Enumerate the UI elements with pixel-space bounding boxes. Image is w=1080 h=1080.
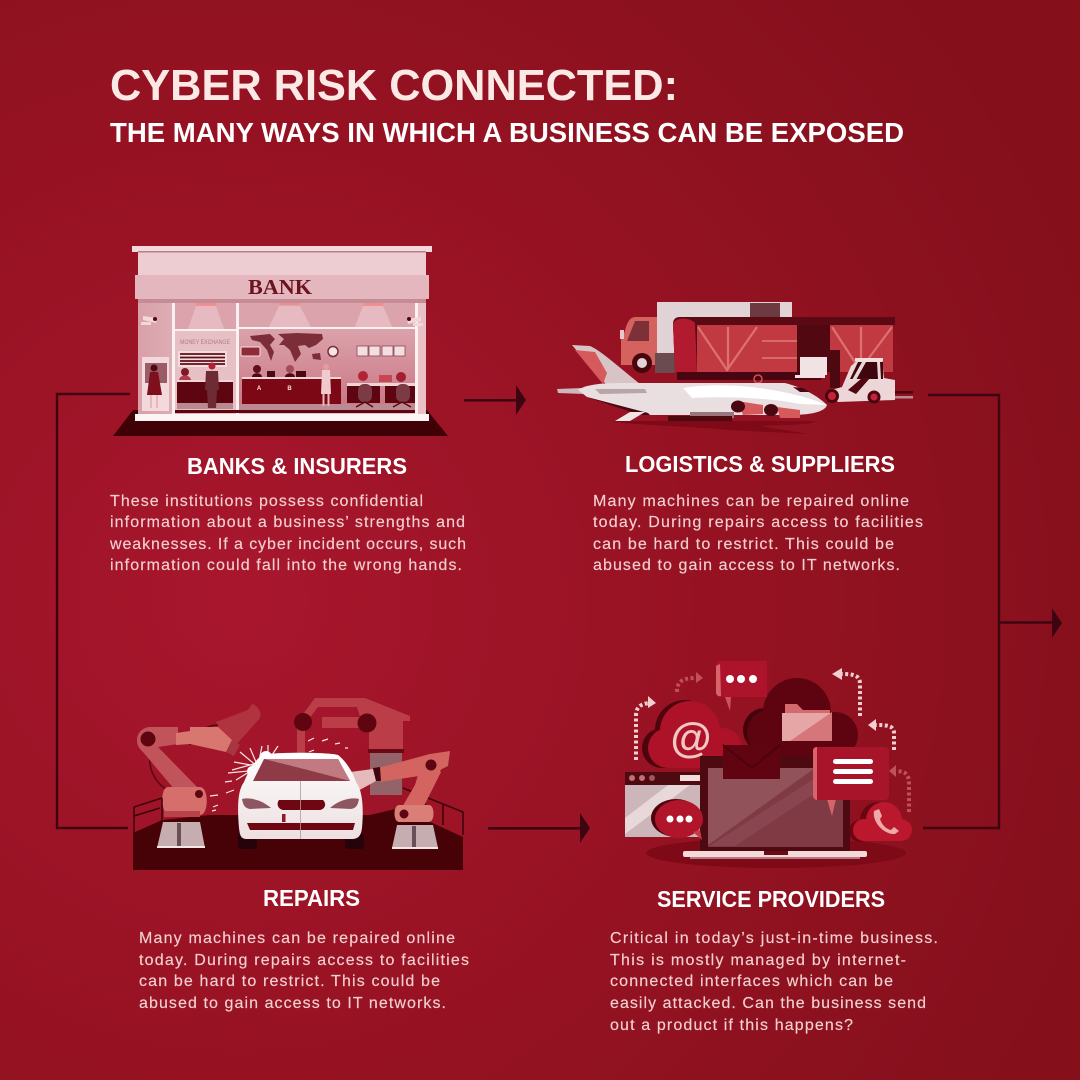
left robot arm (137, 727, 240, 848)
customer (205, 362, 219, 408)
text: banks: These institutions possess confidential (110, 493, 423, 510)
railing left (134, 798, 162, 838)
cloud: telephone (849, 802, 912, 842)
text: repairs: today. During repairs access to facilities (139, 952, 469, 969)
text: service providers: easily attacked. Can the business send (610, 995, 926, 1012)
right robot arm (350, 751, 450, 849)
truck (620, 302, 792, 373)
illustration: bank (113, 246, 448, 436)
heading: service providers: SERVICE PROVIDERS (657, 886, 885, 912)
illustration: repairs (133, 698, 463, 870)
cctv cameras (141, 316, 423, 326)
laptop (683, 756, 867, 859)
plane shadow (610, 421, 815, 434)
factory floor (133, 808, 463, 870)
illustration: logistics (557, 302, 913, 434)
money exchange board: MONEY EXCHANGE (180, 339, 231, 346)
text: repairs: abused to gain access to IT networks. (139, 995, 446, 1012)
rail wagon (673, 317, 895, 383)
cloud: folder (743, 678, 858, 760)
chat bubble: top (716, 661, 767, 711)
welding sparks (210, 738, 348, 811)
text: service providers: connected interfaces which can be (610, 973, 893, 990)
text: repairs (139, 930, 469, 1012)
cloud: at sign (642, 700, 742, 768)
text: banks: information could fall into the wrong hands. (110, 557, 462, 574)
envelope (723, 745, 780, 779)
left counter (177, 381, 233, 405)
connector: repairs loop back to banks (57, 394, 130, 828)
bank sign: BANK (248, 275, 313, 299)
illustration: bank: A (257, 386, 262, 392)
text: repairs: can be hard to restrict. This could be (139, 973, 440, 990)
browser window (625, 772, 703, 837)
forklift (825, 350, 913, 404)
subtitle: THE MANY WAYS IN WHICH A BUSINESS CAN BE EXPOSED (110, 117, 904, 148)
illustration: bank: B (287, 386, 292, 392)
window frames (172, 303, 418, 415)
text: logistics: can be hard to restrict. This could be (593, 536, 894, 553)
building base (135, 414, 429, 421)
text: service providers: This is mostly managed by internet- (610, 952, 906, 969)
text: logistics: abused to gain access to IT networks. (593, 557, 900, 574)
text: logistics: today. During repairs access to facilities (593, 514, 923, 531)
office desks and staff (347, 371, 415, 407)
connector with outgoing arrow on right (923, 395, 1062, 828)
arrow: repairs to service providers (488, 813, 590, 843)
text: banks (109, 493, 466, 574)
car (238, 753, 364, 849)
woman at counter (321, 364, 331, 406)
title: CYBER RISK CONNECTED: (110, 62, 678, 110)
woman at atm (147, 364, 162, 408)
text: banks: weaknesses. If a cyber incident occurs, such (109, 536, 466, 553)
cloud: at sign: @ (671, 714, 711, 761)
text: service providers (610, 930, 938, 1034)
teller counter (242, 379, 341, 404)
arrow: banks to logistics (464, 385, 526, 415)
back gantry robot (294, 698, 410, 795)
text: service providers: Critical in today’s just-in-time business. (610, 930, 938, 947)
text: logistics: Many machines can be repaired online (593, 493, 909, 510)
heading: banks: BANKS & INSURERS (187, 453, 407, 479)
text: service providers: out a product if this happens? (610, 1017, 853, 1034)
world map (250, 333, 323, 362)
airplane (557, 345, 827, 421)
chat bubble: bottom left (651, 799, 703, 840)
railing right (403, 788, 463, 835)
chat bubble: menu (813, 747, 889, 816)
dotted arrows (636, 674, 909, 812)
heading: logistics: LOGISTICS & SUPPLIERS (625, 451, 895, 477)
heading: repairs: REPAIRS (263, 885, 360, 911)
rear robot arm (150, 704, 261, 792)
text: repairs: Many machines can be repaired online (139, 930, 455, 947)
illustration: service providers (625, 661, 912, 868)
text: logistics (593, 493, 923, 574)
pallet (795, 357, 827, 378)
text: banks: information about a business’ strengths and (110, 514, 465, 531)
atm (142, 357, 169, 411)
photo frames (357, 346, 405, 356)
